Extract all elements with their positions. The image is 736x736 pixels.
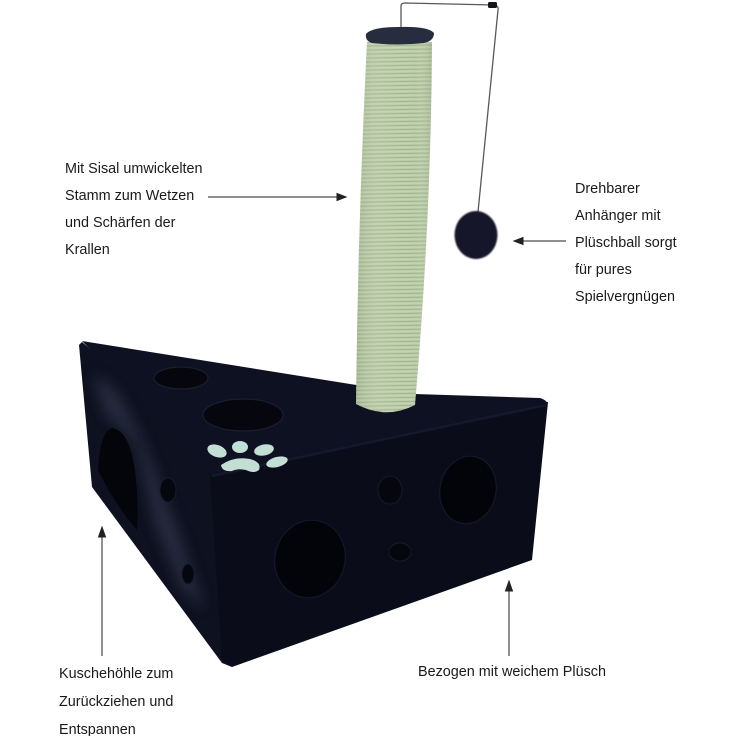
cat scratcher base <box>79 341 548 667</box>
arrow: to post <box>208 194 346 200</box>
sisal scratching post <box>356 27 434 412</box>
wire arm <box>401 3 498 212</box>
callout: sisal trunk: Stamm zum Wetzen <box>65 188 194 204</box>
fur highlights on left face <box>94 378 202 602</box>
hanging toy <box>401 2 498 259</box>
callout: pendant: Anhänger mit <box>575 208 661 224</box>
dents: small holes <box>160 476 411 584</box>
hole: top middle <box>203 399 283 431</box>
front ridge highlight <box>212 405 547 476</box>
base: top face <box>82 341 547 476</box>
callout: cave: Zurückziehen und <box>59 694 173 710</box>
arrow: to plush <box>506 581 512 656</box>
hole: front right <box>434 451 502 529</box>
base: front side face <box>208 402 548 667</box>
hole: top back <box>154 367 208 389</box>
callout: pendant <box>514 181 677 305</box>
callout: cave <box>59 527 173 736</box>
callout: pendant: Plüschball sorgt <box>575 235 677 251</box>
text: cave: Kuschehöhle zum <box>59 666 173 682</box>
text: plush: Bezogen mit weichem Plüsch <box>418 664 606 680</box>
arrow: to ball <box>514 238 566 244</box>
base: left side face <box>79 342 232 667</box>
text: pendant: Drehbarer <box>575 181 640 197</box>
fur highlight patch <box>94 378 202 602</box>
callout: sisal trunk: und Schärfen der <box>65 215 176 231</box>
post body <box>356 42 432 412</box>
plush ball <box>454 211 498 259</box>
callout: sisal trunk: Krallen <box>65 242 110 258</box>
callout: pendant: für pures <box>575 262 632 278</box>
wire clip <box>488 2 497 8</box>
callout: sisal trunk <box>65 161 346 258</box>
post top cap <box>366 27 434 44</box>
callout: pendant: Spielvergnügen <box>575 289 675 305</box>
hole: left cave <box>98 428 138 530</box>
icon: paw print <box>206 441 289 472</box>
post shading <box>356 42 432 412</box>
text: sisal: Mit Sisal umwickelten <box>65 161 203 177</box>
hole: front left <box>266 512 354 606</box>
arrow: to cave <box>98 527 106 656</box>
callout: plush <box>418 581 606 680</box>
